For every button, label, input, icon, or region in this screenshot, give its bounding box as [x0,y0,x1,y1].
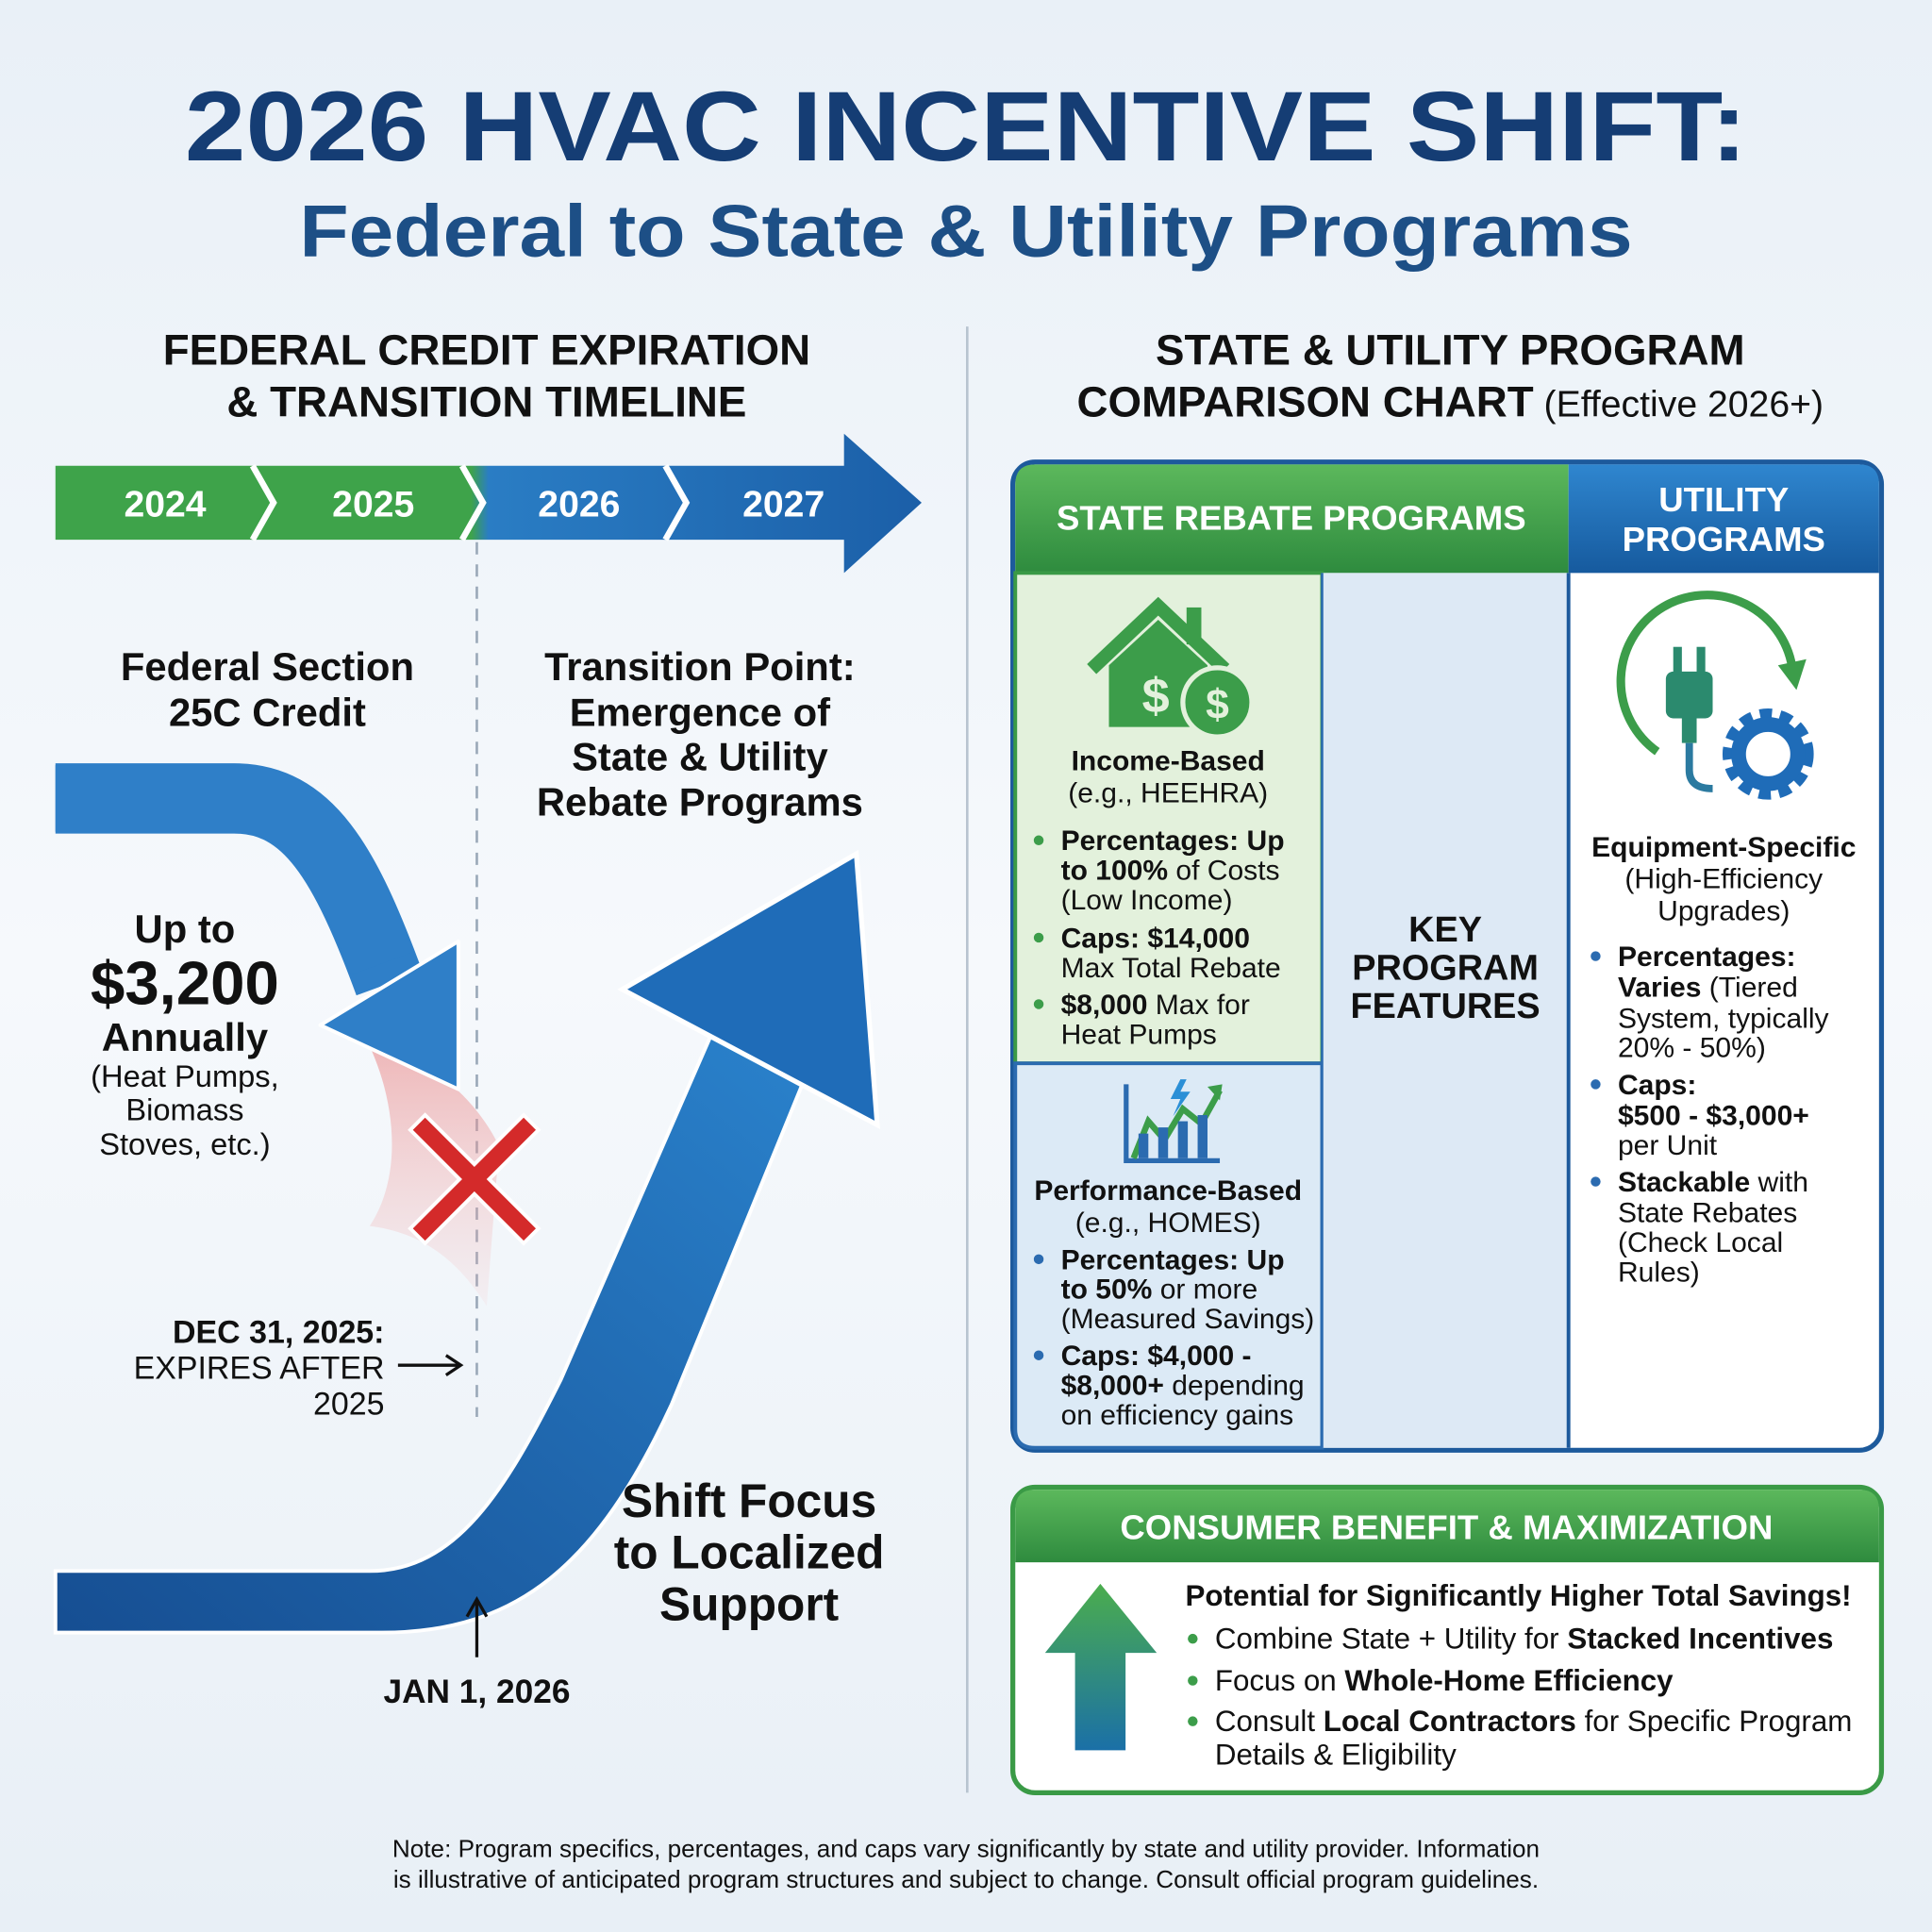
text: equipment specific: Caps: [1618,1070,1696,1101]
text: equipment specific: Stackable with [1618,1167,1808,1198]
dec 31 label: EXPIRES AFTER [134,1351,385,1387]
icon: plug and gear [1621,595,1807,791]
pink fade [358,1023,499,1306]
panel: comparison chart [1013,462,1881,1450]
text: performance based: Caps: $4,000 - [1061,1341,1252,1372]
text: income based: (Low Income) [1061,885,1232,916]
key program features [1350,910,1541,1026]
text: income based: Income-Based [1072,745,1265,776]
text: income based: to 100% of Costs [1061,856,1280,887]
text: equipment specific: (Check Local [1618,1227,1783,1258]
right heading: STATE & UTILITY PROGRAM [1156,326,1745,375]
shift focus [614,1474,884,1631]
benefit list [1185,1579,1852,1771]
shift focus: Shift Focus [622,1474,876,1527]
left heading [163,326,810,425]
key program features: FEATURES [1350,987,1541,1026]
text: performance based: (Measured Savings) [1061,1304,1314,1335]
up to 3200: $3,200 [91,948,279,1017]
icon: house dollar: $ [1142,669,1170,724]
transition label: Rebate Programs [537,780,863,824]
icon: up arrow [1041,1581,1160,1752]
up to 3200: Biomass [125,1091,244,1126]
panel: consumer benefit [1013,1487,1881,1792]
benefit list: Consult Local Contractors for Specific Program [1215,1705,1852,1738]
down arrow [56,798,458,1090]
footnote [392,1834,1540,1893]
text: performance based: (e.g., HOMES) [1075,1208,1261,1239]
header: utility programs: UTILITY [1658,480,1789,519]
timeline arrow: 2027 [742,484,824,525]
text: equipment specific: State Rebates [1618,1198,1797,1229]
dec 31 label: DEC 31, 2025: [173,1315,385,1351]
text: income based: (e.g., HEEHRA) [1068,777,1268,808]
benefit list: Focus on Whole-Home Efficiency [1215,1664,1674,1697]
text: equipment specific: System, typically [1618,1003,1829,1034]
up to 3200: Up to [135,907,235,951]
text: equipment specific: (High-Efficiency [1624,864,1823,895]
text: income based: $8,000 Max for [1061,990,1250,1021]
text: income based: Percentages: Up [1061,825,1285,857]
header: utility programs: PROGRAMS [1623,520,1825,558]
up to 3200 [91,907,279,1161]
left heading: FEDERAL CREDIT EXPIRATION [163,326,810,375]
federal 25C label [121,644,414,734]
text: equipment specific: Varies (Tiered [1618,973,1798,1004]
text: equipment specific: $500 - $3,000+ [1618,1100,1809,1131]
text: performance based [1034,1175,1314,1431]
text: equipment specific: Equipment-Specific [1591,832,1856,863]
title: Federal to State & Utility Programs [299,190,1633,273]
text: equipment specific: Rules) [1618,1257,1700,1288]
dec 31 label [134,1315,460,1422]
shift focus: to Localized [614,1526,884,1579]
timeline arrow: 2025 [332,484,414,525]
big rising arrow [56,854,877,1633]
icon: house dollar: $ [1206,681,1229,727]
federal 25C label: Federal Section [121,644,414,689]
header: state rebate programs: STATE REBATE PROGRAMS [1057,499,1526,538]
text: performance based: Performance-Based [1034,1175,1302,1207]
title [185,72,1747,273]
title: 2026 HVAC INCENTIVE SHIFT: [185,72,1747,182]
text: performance based: to 50% or more [1061,1274,1257,1306]
footnote: is illustrative of anticipated program structures and subject to change. Consult official program guidelines. [393,1865,1539,1893]
benefit list: Potential for Significantly Higher Total Savings! [1185,1579,1852,1612]
text: equipment specific: per Unit [1618,1130,1718,1161]
right heading: COMPARISON CHART (Effective 2026+) [1077,377,1824,425]
transition label [537,644,863,824]
icon: house dollar [1091,607,1252,737]
transition label: State & Utility [572,734,828,778]
footnote: Note: Program specifics, percentages, and caps vary significantly by state and utility provider. Information [392,1834,1540,1862]
up to 3200: Annually [102,1015,269,1059]
icon: red X [410,1115,539,1243]
text: equipment specific [1591,832,1856,1288]
up to 3200: (Heat Pumps, [91,1058,279,1093]
benefit list: Combine State + Utility for Stacked Incentives [1215,1623,1833,1656]
text: equipment specific: Upgrades) [1657,896,1790,927]
icon: chart [1126,1079,1223,1160]
timeline arrow: 2026 [538,484,620,525]
text: performance based: on efficiency gains [1061,1400,1293,1431]
shift focus: Support [659,1578,839,1631]
text: performance based: $8,000+ depending [1061,1371,1305,1402]
key program features: PROGRAM [1352,948,1539,988]
text: equipment specific: Percentages: [1618,941,1796,973]
federal 25C label: 25C Credit [169,690,366,734]
up to 3200: Stoves, etc.) [99,1126,271,1161]
text: income based: Caps: $14,000 [1061,923,1250,954]
jan 1 label [384,1599,570,1710]
transition label: Transition Point: [544,644,856,689]
key program features: KEY [1408,910,1482,950]
dec 31 label: 2025 [313,1386,385,1422]
text: income based: Heat Pumps [1061,1019,1217,1050]
timeline arrow [56,434,922,573]
transition label: Emergence of [570,690,830,734]
right heading [1077,326,1824,425]
timeline arrow: 2024 [124,484,207,525]
text: performance based: Percentages: Up [1061,1244,1285,1275]
text: income based [1034,745,1285,1050]
text: equipment specific: 20% - 50%) [1618,1033,1766,1064]
header: utility programs [1623,480,1825,558]
left heading: & TRANSITION TIMELINE [226,377,746,425]
text: income based: Max Total Rebate [1061,953,1281,984]
benefit list: Details & Eligibility [1215,1738,1457,1771]
jan 1 label: JAN 1, 2026 [384,1674,570,1710]
panel: consumer benefit: CONSUMER BENEFIT & MAXIMIZATION [1120,1507,1773,1546]
